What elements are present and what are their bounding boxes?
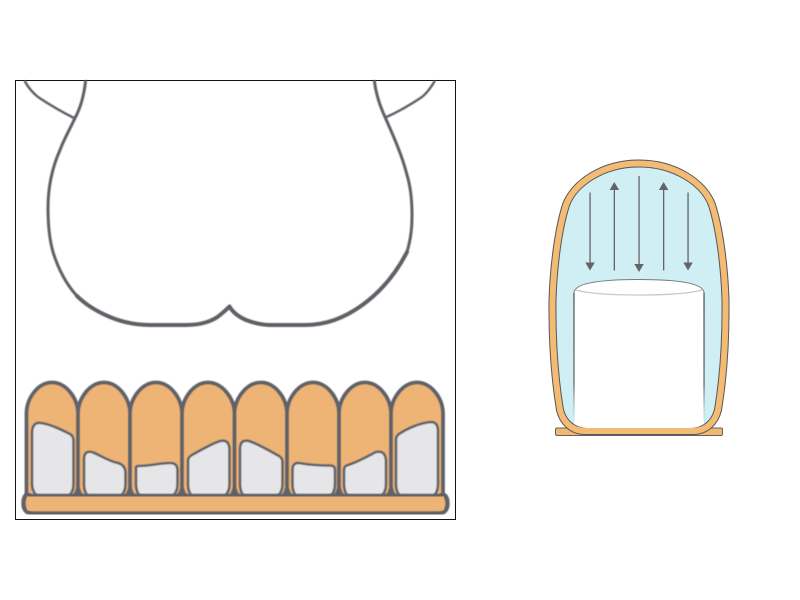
arrow 1: down [585,192,595,270]
block left edge [573,293,575,422]
cell 1 [26,382,78,499]
cell 2 [78,382,130,499]
block inner rim [576,290,702,295]
base strip [24,494,448,514]
cell wall with blue interior [552,164,726,431]
cell 6 [287,382,339,499]
white inner block [574,280,704,428]
arrows [585,176,693,272]
cell 5 [234,382,287,499]
cell 7 [339,382,391,499]
block top outline [574,280,704,293]
orange wall band [552,164,726,431]
row of eight cells [26,382,443,499]
arrow 2: up [610,182,619,270]
wall feet [71,484,398,497]
panel frame [16,80,456,520]
block right edge [703,293,705,422]
panel: right enlarged cell [552,164,726,436]
arrow 5: down [683,192,693,270]
foot strip [556,428,722,436]
arrow 4: up [659,182,668,270]
cell 8 [391,382,443,499]
panel: left framed view [16,80,456,520]
arrow 3: down [634,176,644,272]
large white cell outline [25,82,434,325]
cell 3 [130,382,182,499]
base strip top fill [27,496,444,510]
cell 4 [182,382,234,499]
